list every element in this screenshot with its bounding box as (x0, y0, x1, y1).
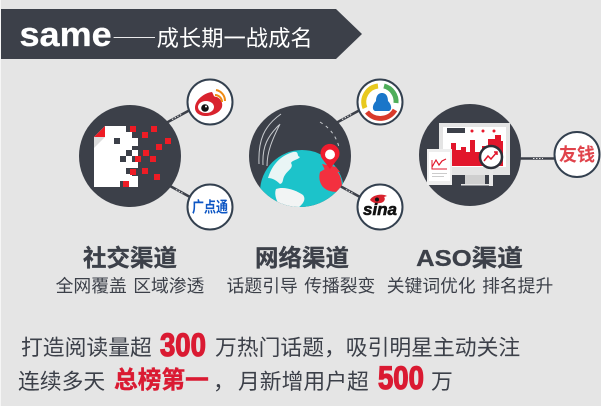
icon: sina badge (358, 184, 402, 230)
number: 500: 500 (378, 361, 424, 397)
column: social channels text: 全网覆盖 区域渗透 (56, 276, 205, 296)
title (20, 16, 313, 54)
summary line 2: 连续多天 (18, 369, 105, 394)
column: ASO channels text: 关键词优化 排名提升 (387, 276, 553, 296)
summary line 1: 万热门话题，吸引明星主动关注 (215, 335, 520, 360)
summary line 2: 月新增用户超 (238, 369, 369, 394)
icon: guangdiantong badge (188, 184, 232, 230)
panel: ASO channels illustration (419, 104, 521, 206)
column: social channels text: 社交渠道 (83, 244, 177, 271)
icon: guangdiantong badge: 广点通 (192, 198, 228, 215)
column: network channels text (227, 244, 375, 296)
summary line 2: ， (213, 369, 235, 394)
icon: sina badge: sina (363, 200, 397, 219)
icon: magnifier (480, 146, 502, 186)
column: network channels text: 网络渠道 (255, 244, 349, 271)
column: social channels text (56, 244, 205, 296)
summary line 1: 打造阅读量超 (21, 335, 152, 360)
icon: location pin (320, 144, 340, 169)
title: same (20, 16, 112, 54)
icon: tablet (427, 149, 452, 185)
number: 300: 300 (160, 328, 206, 364)
summary line 1 (21, 328, 520, 364)
white motion arcs (259, 114, 339, 166)
icon: weibo badge (188, 80, 232, 124)
title: ——成长期一战成名 (112, 21, 313, 53)
column: ASO channels text (387, 245, 553, 296)
icon: youqian badge (554, 132, 600, 177)
panel: network channels illustration (249, 105, 351, 207)
icon: monitor with chart (439, 123, 510, 186)
summary line 2: 总榜第一 (114, 367, 209, 394)
panel: social channels illustration (79, 105, 181, 207)
summary line 2: 万 (431, 369, 453, 394)
icon: youqian badge: 友钱 (559, 145, 595, 165)
icon: dissolving document (94, 126, 171, 187)
column: network channels text: 话题引导 传播裂变 (227, 276, 375, 296)
globe (260, 150, 343, 207)
connectors: social channels (166, 110, 556, 197)
header banner (1, 9, 362, 59)
summary line 2 (18, 361, 453, 397)
column: ASO channels text: ASO渠道 (416, 245, 523, 272)
icon: tencent QQ badge (358, 80, 402, 124)
